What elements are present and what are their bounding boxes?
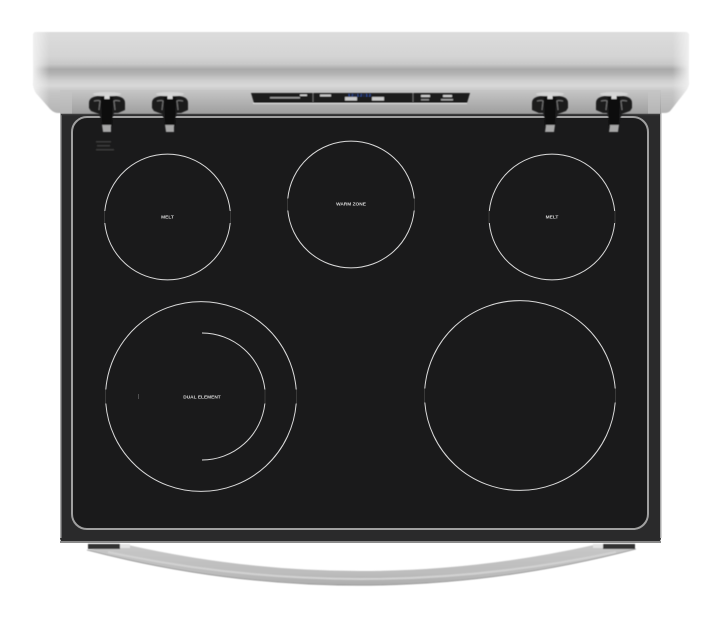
label: melt left: MELT [161,214,174,220]
hood: rear control console [33,32,689,113]
burner: center warm zone [288,141,414,268]
knob 3 [532,92,568,132]
glass cooktop [72,117,648,529]
control display panel [251,92,470,104]
burner: front right [424,301,616,490]
label: warm zone: WARM ZONE [336,202,367,208]
display readout: 12:12:12 [348,92,372,98]
seam under console [61,114,660,116]
control knobs [89,92,632,132]
small cooktop logo mark [96,141,114,150]
range body [60,100,662,543]
label: melt right: MELT [546,214,558,220]
burner: front left dual element [106,302,296,491]
burner: rear right melt [489,154,615,280]
knob 4 [596,92,632,132]
knob 2 [152,92,188,132]
burner: rear left melt [104,154,230,280]
oven door handle [87,544,636,585]
cooktop back rail [60,90,661,114]
knob 1 [89,92,125,132]
label: dual element: DUAL ELEMENT [183,394,221,400]
